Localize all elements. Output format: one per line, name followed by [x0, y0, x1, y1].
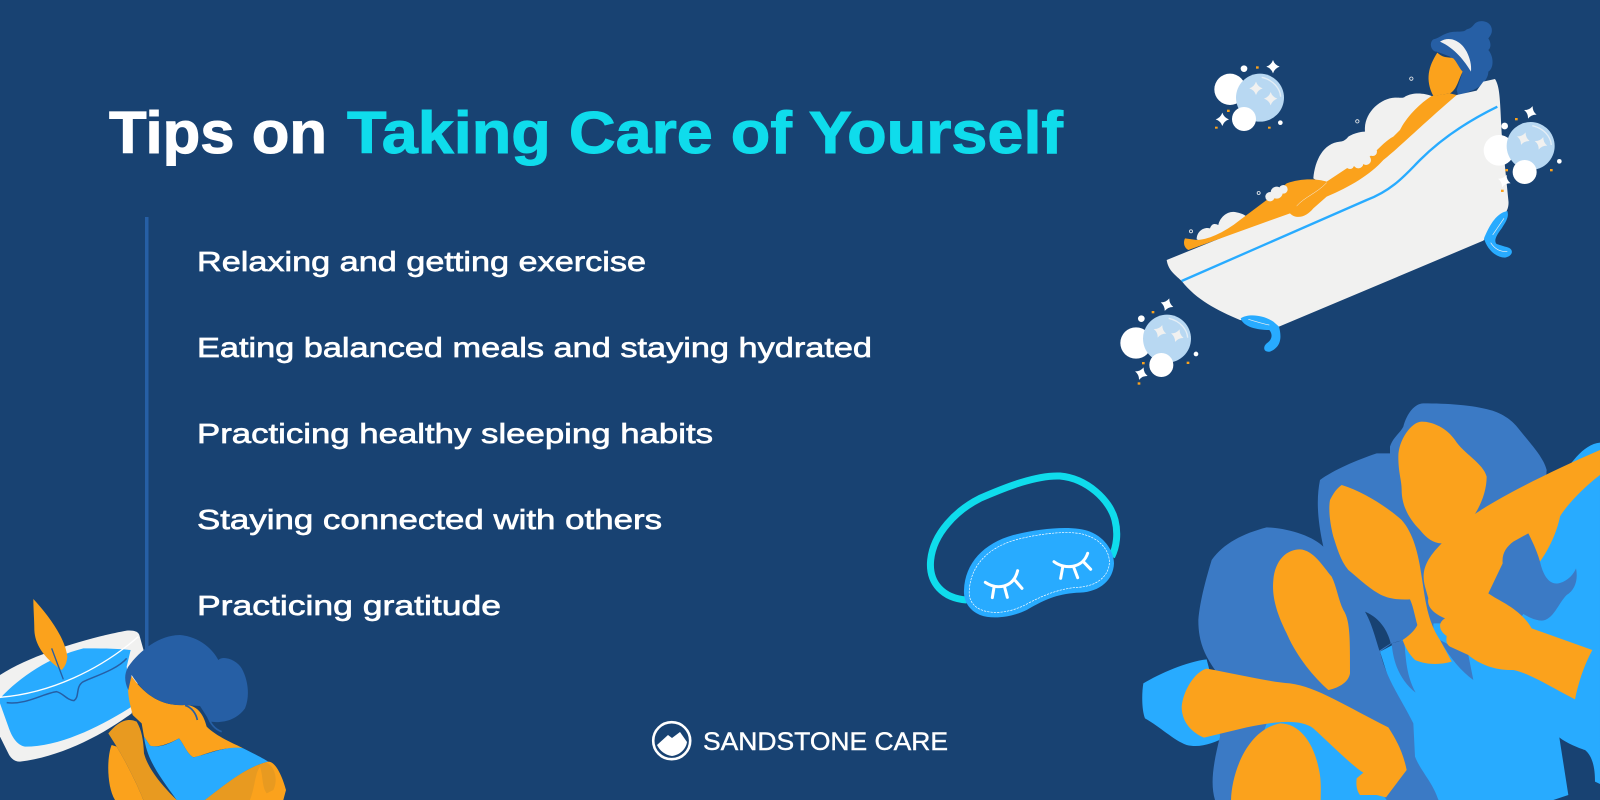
- hair strand: [185, 705, 222, 732]
- candle dish: [0, 631, 144, 762]
- tub foot left: [1241, 315, 1280, 352]
- figure left: arm: [1182, 669, 1407, 797]
- woman left arm: [108, 745, 143, 800]
- tips list: Eating balanced meals and staying hydrated: [197, 332, 872, 363]
- foam on body: [1265, 147, 1377, 201]
- mask stitching: [969, 533, 1109, 612]
- woman left hand: [108, 720, 177, 800]
- list rule: [145, 217, 148, 657]
- tips list: Practicing gratitude: [197, 590, 501, 621]
- figure bottom: face: [1231, 723, 1321, 800]
- bubbles right: [1484, 104, 1562, 192]
- woman hair: [125, 635, 248, 722]
- illustration: candle: [0, 599, 144, 762]
- mask body: [964, 528, 1114, 617]
- tips list: [197, 246, 872, 621]
- figure top: face and arms: [1398, 422, 1600, 699]
- tub stripe: [1182, 107, 1497, 281]
- mask strap: [930, 476, 1117, 600]
- figure middle: face: [1329, 485, 1452, 664]
- illustration: woman in bathtub: [1120, 21, 1562, 385]
- logo mark: [653, 722, 690, 759]
- foam rings: [1189, 77, 1413, 233]
- woman right shoulder: [205, 762, 286, 800]
- illustration: sleep mask: [930, 476, 1117, 617]
- logo: [653, 722, 948, 759]
- hair middle and left: [1198, 453, 1438, 800]
- flame: [33, 599, 67, 670]
- bubbles bottom left: [1120, 296, 1198, 385]
- hair: [1431, 21, 1493, 96]
- bubbles top left: [1214, 60, 1284, 131]
- body: [1184, 93, 1457, 250]
- bathtub: [1167, 79, 1509, 327]
- tub foot right: [1484, 211, 1512, 258]
- candle wax: [0, 648, 132, 747]
- title: [109, 100, 1063, 166]
- illustration: group embrace: [1142, 403, 1600, 800]
- shadow notch: [1365, 612, 1391, 651]
- bath foam: [1197, 93, 1432, 243]
- closed eyes: [985, 553, 1091, 598]
- tips list: Staying connected with others: [197, 504, 662, 535]
- light blue body left: [1142, 659, 1227, 746]
- hair strand right: [1440, 640, 1473, 680]
- woman face and neck: [128, 675, 243, 757]
- rim highlight: [0, 637, 138, 697]
- tips list: Relaxing and getting exercise: [197, 246, 646, 277]
- hair strand wedge: [1392, 640, 1416, 693]
- face: [1429, 53, 1463, 96]
- light blue body right: [1380, 443, 1600, 800]
- hair top: [1390, 403, 1577, 623]
- arm line: [1297, 183, 1327, 206]
- title: Tips on: [109, 100, 327, 166]
- title: Taking Care of Yourself: [347, 100, 1063, 166]
- figure left: face: [1273, 549, 1350, 690]
- illustration: woman with candle: [108, 635, 286, 800]
- foot highlights: [1248, 218, 1507, 325]
- logo wordmark: SANDSTONE CARE: [703, 728, 948, 756]
- woman right hand: [205, 763, 276, 800]
- tips list: Practicing healthy sleeping habits: [197, 418, 713, 449]
- wick: [52, 648, 63, 679]
- wax drip line: [7, 658, 127, 703]
- headband: [1440, 39, 1471, 72]
- light blue shirt lower: [1240, 720, 1387, 800]
- woman top: [144, 737, 268, 800]
